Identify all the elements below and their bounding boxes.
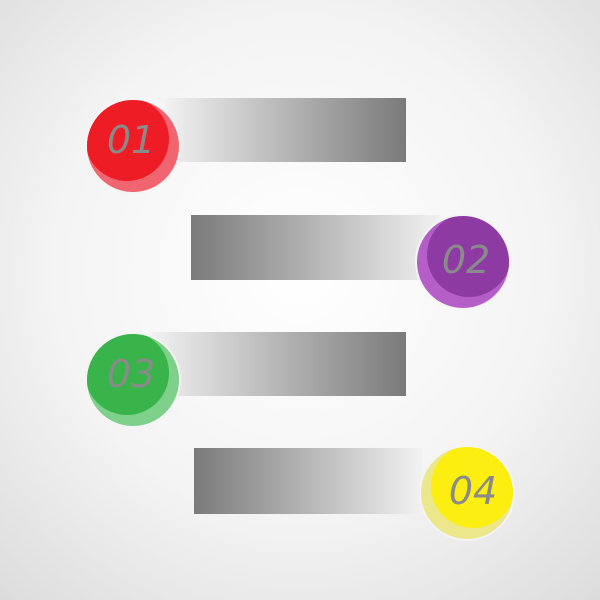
bar 02 xyxy=(191,215,441,280)
badge 01 xyxy=(85,97,181,194)
item 01 xyxy=(85,97,406,194)
item 04 xyxy=(194,444,515,541)
badge 04 xyxy=(419,444,515,541)
item 02 xyxy=(191,213,511,310)
item 03 xyxy=(85,331,406,428)
badge 03 xyxy=(85,331,181,428)
badge 02 xyxy=(415,213,511,310)
badge 01: 01 xyxy=(107,118,155,162)
badge 03: 03 xyxy=(107,352,155,396)
bar 01 xyxy=(165,98,406,162)
bar 04 xyxy=(194,448,422,514)
bar 03 xyxy=(150,332,406,396)
badge 02: 02 xyxy=(442,238,490,282)
badge 04: 04 xyxy=(449,469,497,513)
